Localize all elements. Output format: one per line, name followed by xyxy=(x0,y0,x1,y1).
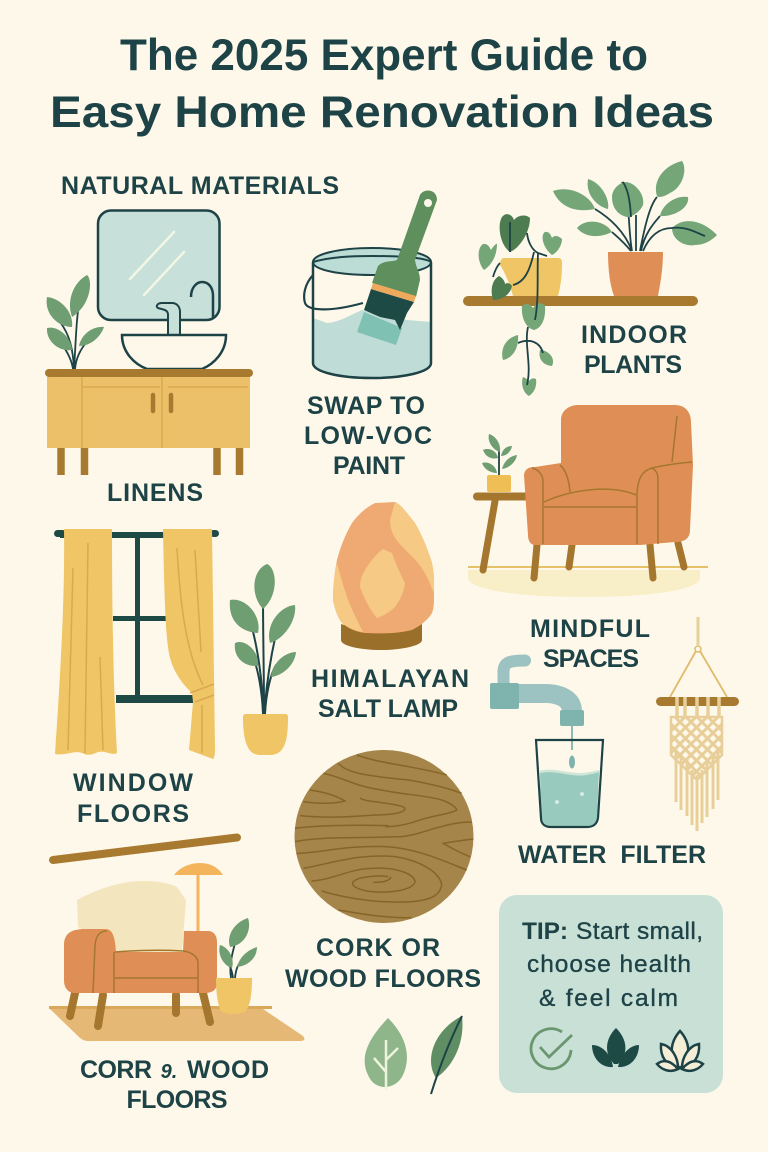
label: corr wood floors xyxy=(80,1056,269,1114)
label: himalayan salt lamp: HIMALAYAN xyxy=(311,665,469,693)
label: swap to low-voc paint xyxy=(304,392,432,480)
tip text: & feel calm xyxy=(539,985,678,1012)
title: Easy Home Renovation Ideas xyxy=(50,88,714,137)
illustration: orange armchair with side table xyxy=(468,405,708,597)
label: mindful spaces: MINDFUL xyxy=(530,615,650,643)
icon: dark lotus leaves xyxy=(592,1028,639,1067)
label: water filter: WATER FILTER xyxy=(518,841,706,869)
illustration: wooden floor disc xyxy=(294,750,474,923)
tip text: choose health xyxy=(527,951,691,978)
label: cork or wood floors xyxy=(285,934,481,993)
label: corr wood floors: CORR xyxy=(80,1056,152,1084)
illustration: shelf plank xyxy=(53,838,237,860)
label: himalayan salt lamp xyxy=(311,665,469,723)
illustration: bathroom vanity xyxy=(45,210,253,475)
label: swap to low-voc paint: SWAP TO xyxy=(307,392,425,420)
label: window floors: FLOORS xyxy=(77,800,189,828)
illustration: himalayan salt lamp xyxy=(333,502,434,650)
icon: outlined lotus xyxy=(657,1031,703,1071)
label: corr wood floors: WOOD xyxy=(187,1056,269,1084)
illustration: shelf with plants xyxy=(463,161,717,396)
label: corr wood floors: 9. xyxy=(161,1061,177,1083)
title: The 2025 Expert Guide to xyxy=(120,31,648,80)
illustration: potted plant beside window xyxy=(230,564,296,755)
label: mindful spaces xyxy=(530,615,650,673)
label: indoor plants: PLANTS xyxy=(584,351,682,379)
icon: light leaf xyxy=(365,1018,407,1090)
illustration: paint can with brush xyxy=(304,191,437,378)
tip text: Start small, xyxy=(576,918,703,945)
icon: dark leaf xyxy=(431,1016,463,1094)
label: corr wood floors: FLOORS xyxy=(126,1086,228,1114)
label: himalayan salt lamp: SALT LAMP xyxy=(318,695,458,723)
label: indoor plants xyxy=(581,321,687,379)
tip text: TIP: xyxy=(522,918,568,945)
illustration: faucet and glass of water xyxy=(490,660,603,827)
label: window floors: WINDOW xyxy=(73,769,193,797)
tip text xyxy=(522,918,703,1012)
title xyxy=(50,31,714,137)
illustration: armchair on rug xyxy=(49,863,304,1041)
label: swap to low-voc paint: LOW-VOC xyxy=(304,422,432,450)
label: cork or wood floors: WOOD FLOORS xyxy=(285,965,481,993)
label: indoor plants: INDOOR xyxy=(581,321,687,349)
heading: natural materials: NATURAL MATERIALS xyxy=(61,172,339,200)
label: linens: LINENS xyxy=(107,479,203,507)
panel: tip xyxy=(499,895,723,1093)
illustration: window with curtains xyxy=(54,529,219,759)
icon: check circle xyxy=(531,1029,572,1069)
illustration: macrame wall hanging xyxy=(656,617,739,831)
label: window floors xyxy=(73,769,193,828)
label: mindful spaces: SPACES xyxy=(543,645,639,673)
label: cork or wood floors: CORK OR xyxy=(316,934,440,962)
label: swap to low-voc paint: PAINT xyxy=(333,452,405,480)
